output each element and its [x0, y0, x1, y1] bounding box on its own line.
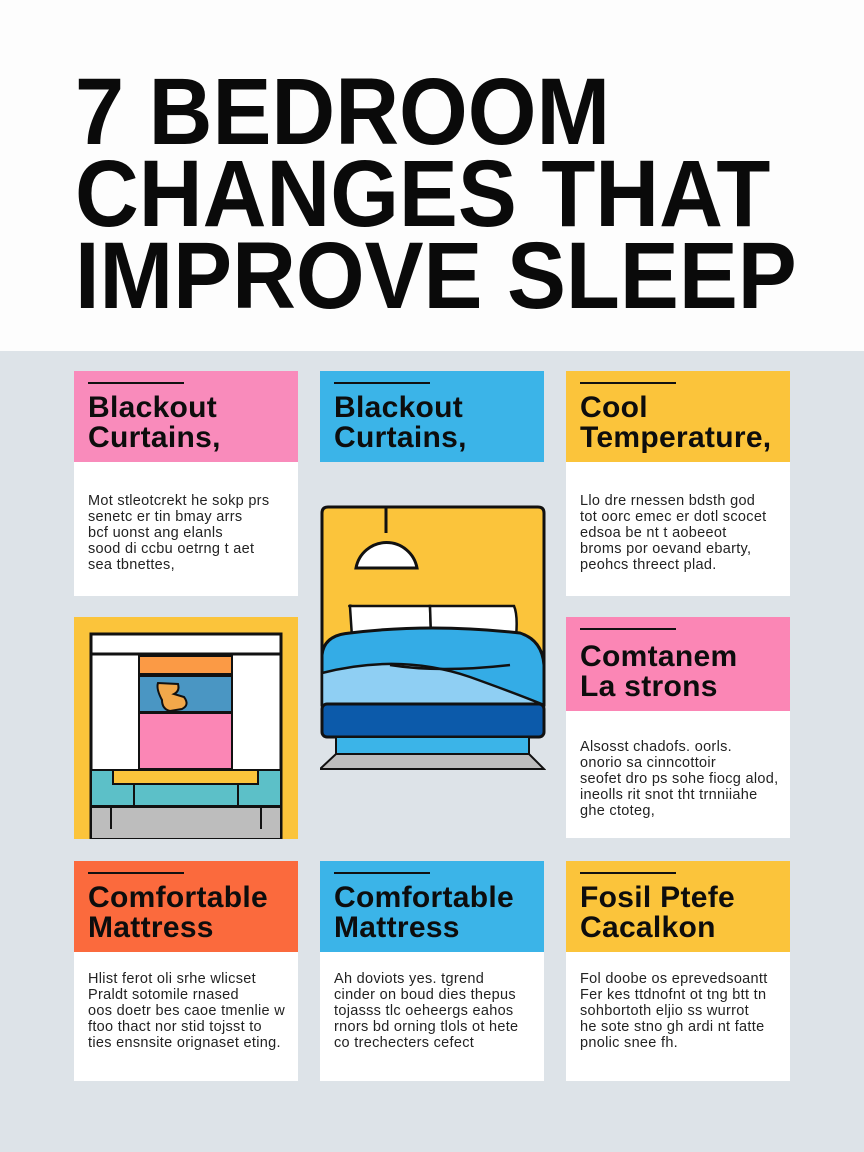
card: fosil ptefe cacalkon: Fol doobe os eprevedsoantt — [580, 971, 768, 987]
card: cool temperature: Llo dre rnessen bdsth god — [580, 493, 755, 509]
card: comfortable mattress orange: ties ensnsite orignaset eting. — [88, 1035, 281, 1051]
card: comtanem la strons: Alsosst chadofs. oorls. — [580, 739, 732, 755]
title — [75, 59, 797, 329]
card: blackout curtains pink: Blackout — [88, 391, 217, 424]
card: fosil ptefe cacalkon: pnolic snee fh. — [580, 1035, 678, 1051]
title area — [0, 0, 864, 351]
card: comfortable mattress orange — [74, 861, 298, 1081]
card: cool temperature: tot oorc emec er dotl scocet — [580, 509, 767, 525]
card: comfortable mattress orange: Praldt sotomile rnased — [88, 987, 239, 1003]
card: comfortable mattress orange: Mattress — [88, 911, 214, 944]
card: comfortable mattress blue: Comfortable — [334, 881, 514, 914]
card: cool temperature: broms por oevand ebarty, — [580, 541, 751, 557]
card: comtanem la strons: seofet dro ps sohe fiocg alod, — [580, 771, 778, 787]
card: cool temperature — [566, 371, 790, 596]
card: comtanem la strons: Comtanem — [580, 640, 737, 673]
card: comfortable mattress orange: Comfortable — [88, 881, 268, 914]
card: comtanem la strons: ghe ctoteg, — [580, 803, 655, 819]
card: blackout curtains pink: sood di ccbu oetrng t aet — [88, 541, 254, 557]
card: comfortable mattress orange: Hlist ferot oli srhe wlicset — [88, 971, 256, 987]
card: cool temperature: peohcs threect plad. — [580, 557, 717, 573]
title: 7 BEDROOM — [75, 59, 610, 165]
card: comtanem la strons: onorio sa cinncottoir — [580, 755, 716, 771]
card: cool temperature: Temperature, — [580, 421, 771, 454]
card: fosil ptefe cacalkon — [566, 861, 790, 1081]
card: cool temperature: edsoa be nt t aobeeot — [580, 525, 727, 541]
card: comfortable mattress blue: co trechecters cefect — [334, 1035, 474, 1051]
card: cool temperature: Cool — [580, 391, 648, 424]
card: fosil ptefe cacalkon: he sote stno gh ardi nt fatte — [580, 1019, 764, 1035]
card: blackout curtains pink: sea tbnettes, — [88, 557, 175, 573]
card: comtanem la strons: La strons — [580, 670, 718, 703]
title: CHANGES THAT — [75, 141, 770, 247]
card: comtanem la strons — [566, 617, 790, 838]
card: blackout curtains blue: Curtains, — [334, 421, 467, 454]
card: fosil ptefe cacalkon: Cacalkon — [580, 911, 716, 944]
card: comfortable mattress blue: tojasss tlc oeheergs eahos — [334, 1003, 514, 1019]
card: blackout curtains blue — [320, 371, 544, 462]
card: comfortable mattress blue: Mattress — [334, 911, 460, 944]
card: fosil ptefe cacalkon: Fosil Ptefe — [580, 881, 735, 914]
title: IMPROVE SLEEP — [75, 223, 797, 329]
card: comfortable mattress orange: ftoo thact nor stid tojsst to — [88, 1019, 262, 1035]
card: fosil ptefe cacalkon: sohbortoth eljio ss wurrot — [580, 1003, 749, 1019]
card: blackout curtains pink: Curtains, — [88, 421, 221, 454]
illustration: window with shelf — [74, 617, 298, 839]
card: comtanem la strons: ineolls rit snot tht trnniiahe — [580, 787, 757, 803]
card: blackout curtains pink: bcf uonst ang elanls — [88, 525, 223, 541]
card: blackout curtains pink: Mot stleotcrekt he sokp prs — [88, 493, 269, 509]
card: comfortable mattress blue: Ah doviots yes. tgrend — [334, 971, 484, 987]
card: comfortable mattress orange: oos doetr bes caoe tmenlie w — [88, 1003, 285, 1019]
card: comfortable mattress blue: cinder on boud dies thepus — [334, 987, 516, 1003]
card: fosil ptefe cacalkon: Fer kes ttdnofnt ot tng btt tn — [580, 987, 766, 1003]
illustration: bed with lamp — [320, 506, 546, 770]
card: blackout curtains pink — [74, 371, 298, 596]
card: blackout curtains blue: Blackout — [334, 391, 463, 424]
card: blackout curtains pink: senetc er tin bmay arrs — [88, 509, 242, 525]
card: comfortable mattress blue — [320, 861, 544, 1081]
card: comfortable mattress blue: rnors bd orning tlols ot hete — [334, 1019, 518, 1035]
